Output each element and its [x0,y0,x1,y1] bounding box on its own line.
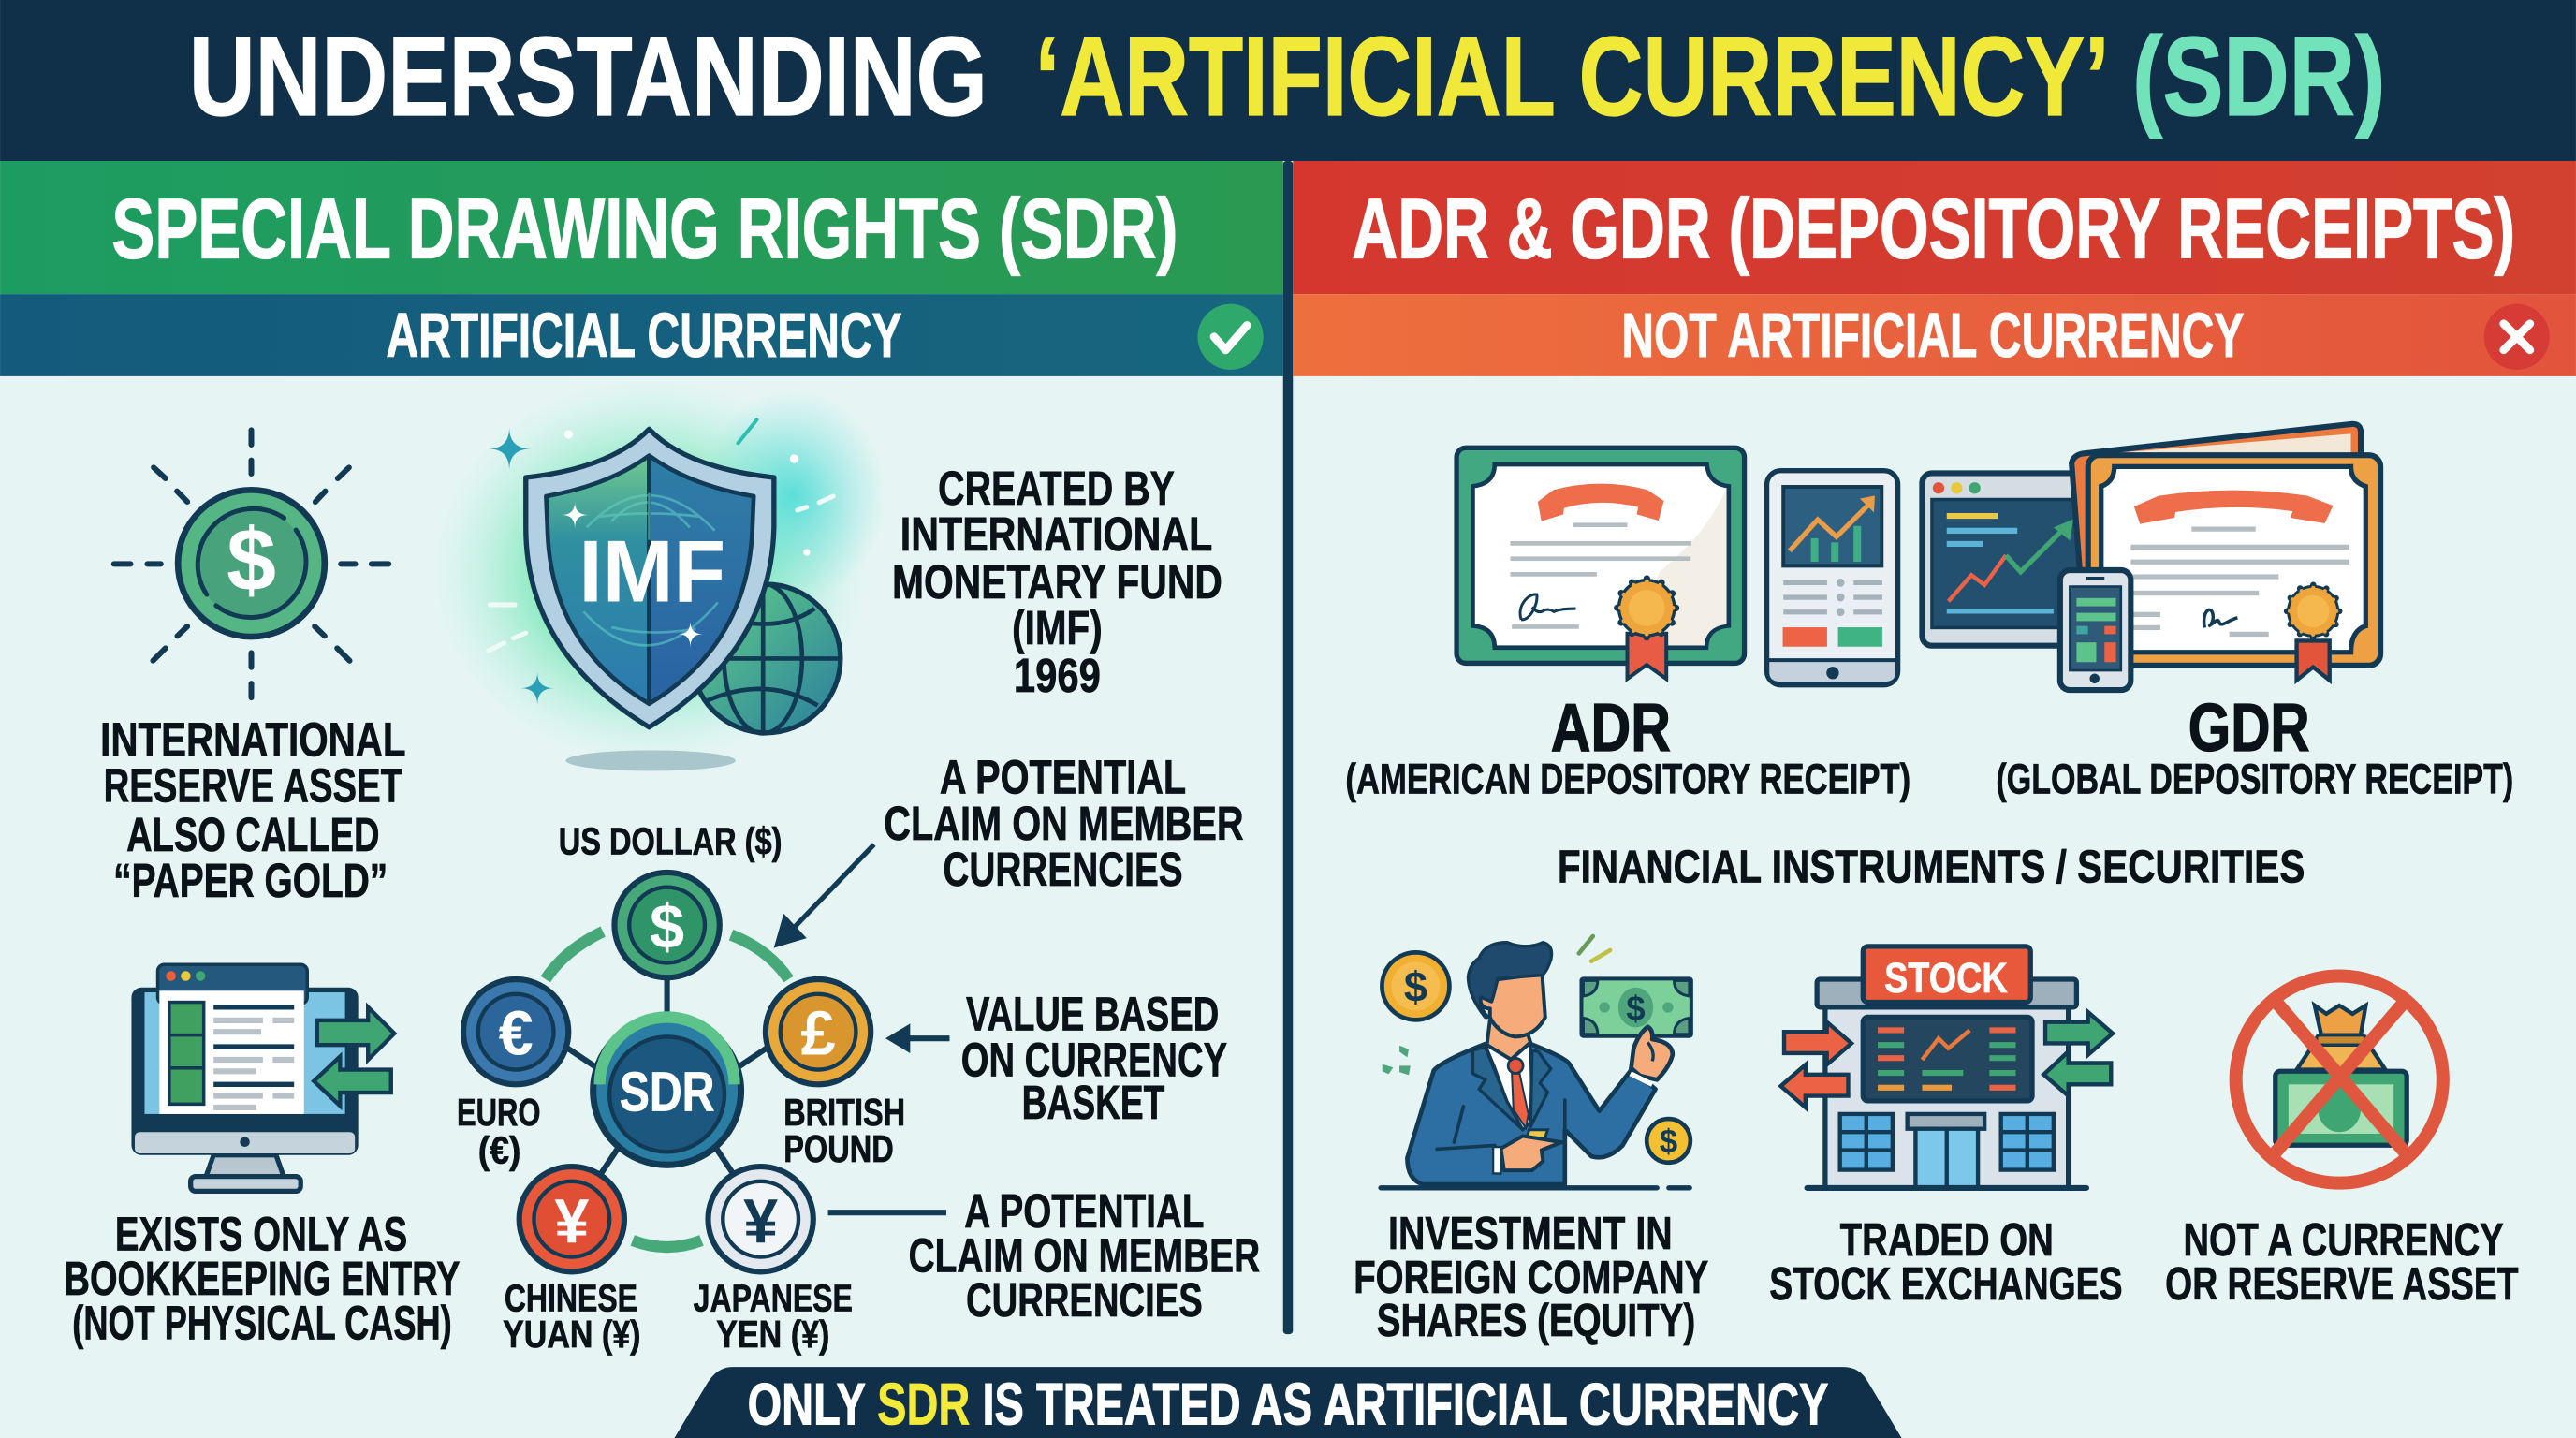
coin: chinese yuan [520,1167,624,1271]
icon: reserve asset coin: $ [227,511,276,610]
label: japanese yen [694,1277,853,1356]
panel: ADR and GDR [1293,161,2576,1346]
text: not a currency or reserve asset [2165,1215,2519,1310]
coin: US dollar [614,873,720,977]
text: potential claim, bottom: CLAIM ON MEMBER [909,1228,1260,1282]
text: potential claim, top [884,751,1244,896]
text: value based on currency basket: BASKET [1022,1076,1164,1129]
coin: euro [463,979,568,1084]
coin: japanese yen [708,1167,813,1271]
arrow: to dollar arc [774,844,874,948]
text: investment in foreign company shares: FOREIGN COMPANY [1354,1253,1708,1303]
hub: SDR: SDR [620,1060,714,1123]
label: japanese yen: YEN (¥) [716,1313,829,1356]
text: GDR [1996,691,2513,803]
text: GDR: GDR [2188,691,2310,766]
icon: IMF shield and globe [431,377,886,770]
sign: stock: STOCK [1884,954,2008,1002]
icon: IMF shield and globe: IMF [578,522,725,621]
text: exists only as bookkeeping entry: EXISTS ONLY AS [115,1208,407,1261]
label: chinese yuan: CHINESE [505,1277,637,1320]
text: international reserve asset: RESERVE ASSET [104,758,402,812]
icon: businessman investor: $ [1404,962,1427,1010]
text: created by IMF 1969: INTERNATIONAL [900,507,1212,561]
text: created by IMF 1969: CREATED BY [938,462,1175,515]
text: potential claim, top: CLAIM ON MEMBER [884,797,1244,850]
text: value based on currency basket: ON CURRENCY [961,1034,1227,1087]
text: created by IMF 1969 [892,462,1222,702]
label: chinese yuan: YUAN (¥) [503,1313,641,1356]
icon: ADR certificate [1456,448,1745,679]
subheading: not artificial currency with cross badge [1293,294,2576,376]
text: potential claim, bottom: A POTENTIAL [964,1184,1204,1238]
subheading: not artificial currency with cross badge: NOT ARTIFICIAL CURRENCY [1621,301,2244,371]
title banner [0,0,2576,161]
coin: british pound [766,979,871,1084]
coin: japanese yen: ¥ [743,1187,778,1256]
text: investment in foreign company shares [1354,1209,1708,1346]
label: japanese yen: JAPANESE [694,1277,853,1320]
title banner: ‘ARTIFICIAL CURRENCY’ [1035,15,2110,139]
vertical divider [1283,161,1293,1334]
label: chinese yuan [503,1277,641,1356]
coin: euro: € [499,1000,534,1069]
text: potential claim, bottom [909,1184,1260,1327]
text: international reserve asset [100,712,406,907]
text: ADR [1345,691,1910,803]
icon: businessman investor: $ [1660,1123,1677,1160]
connector: yen to potential claim [828,1211,946,1214]
label: british pound: POUND [783,1127,894,1170]
title banner: (SDR) [2132,15,2385,139]
title banner: UNDERSTANDING [189,15,988,139]
label: euro [457,1091,540,1172]
coin: chinese yuan: ¥ [554,1187,589,1256]
text: value based on currency basket: VALUE BASED [966,987,1219,1040]
heading: SDR [0,161,1283,294]
text: potential claim, top: A POTENTIAL [940,751,1186,804]
coin: british pound: £ [801,1000,836,1069]
text: traded on stock exchanges [1769,1215,2123,1310]
icon: reserve asset coin [114,430,388,697]
text: created by IMF 1969: MONETARY FUND [892,555,1222,609]
icon: businessman investor [1381,936,1691,1188]
text: exists only as bookkeeping entry: BOOKKEEPING ENTRY [65,1252,461,1305]
heading: ADR and GDR [1293,161,2576,294]
text: international reserve asset: “PAPER GOLD” [113,854,388,907]
text: created by IMF 1969: (IMF) [1012,601,1103,654]
connectors and arcs [546,932,788,1247]
text: traded on stock exchanges: STOCK EXCHANGES [1769,1259,2123,1310]
text: international reserve asset: INTERNATIONAL [100,712,406,766]
text: investment in foreign company shares: INVESTMENT IN [1388,1209,1673,1259]
coin: US dollar: $ [650,893,684,962]
icon: bookkeeping monitor [131,964,394,1191]
text: ADR: (AMERICAN DEPOSITORY RECEIPT) [1345,756,1910,803]
icon: GDR certificate [2071,424,2380,681]
text: exists only as bookkeeping entry: (NOT PHYSICAL CASH) [72,1296,452,1349]
icon: mobile phone [2060,570,2130,690]
text: created by IMF 1969: 1969 [1014,649,1101,702]
label: british pound [783,1091,905,1170]
text: value based on currency basket [961,987,1227,1129]
hub: SDR [593,1017,741,1165]
label: euro: (€) [478,1129,520,1172]
arrow: to pound coin [886,1023,949,1053]
heading: SDR: SPECIAL DRAWING RIGHTS (SDR) [111,182,1178,277]
label: US dollar: US DOLLAR ($) [559,820,782,863]
panel: special drawing rights [0,161,1283,1356]
text: exists only as bookkeeping entry [65,1208,461,1349]
label: british pound: BRITISH [783,1091,905,1134]
label: euro: EURO [457,1091,540,1134]
text: financial instruments: FINANCIAL INSTRUMENTS / SECURITIES [1558,842,2305,892]
text: potential claim, bottom: CURRENCIES [966,1273,1203,1327]
text: international reserve asset: ALSO CALLED [126,808,379,861]
text: potential claim, top: CURRENCIES [943,843,1183,896]
text: investment in foreign company shares: SHARES (EQUITY) [1377,1296,1695,1346]
diagram: SDR currency basket [463,873,871,1271]
icon: not a currency prohibition [2236,976,2443,1183]
text: traded on stock exchanges: TRADED ON [1840,1215,2054,1266]
footer banner: ONLY SDR IS TREATED AS ARTIFICIAL CURRENCY [748,1372,1828,1438]
text: ADR: ADR [1551,691,1671,766]
subheading: artificial currency with check badge [0,294,1283,376]
icon: businessman investor: $ [1626,989,1646,1027]
icon: stock exchange building [1781,946,2113,1188]
icon: browser window with chart [1922,473,2086,646]
subheading: artificial currency with check badge: ARTIFICIAL CURRENCY [386,301,902,371]
icon: tablet with chart [1767,471,1898,685]
